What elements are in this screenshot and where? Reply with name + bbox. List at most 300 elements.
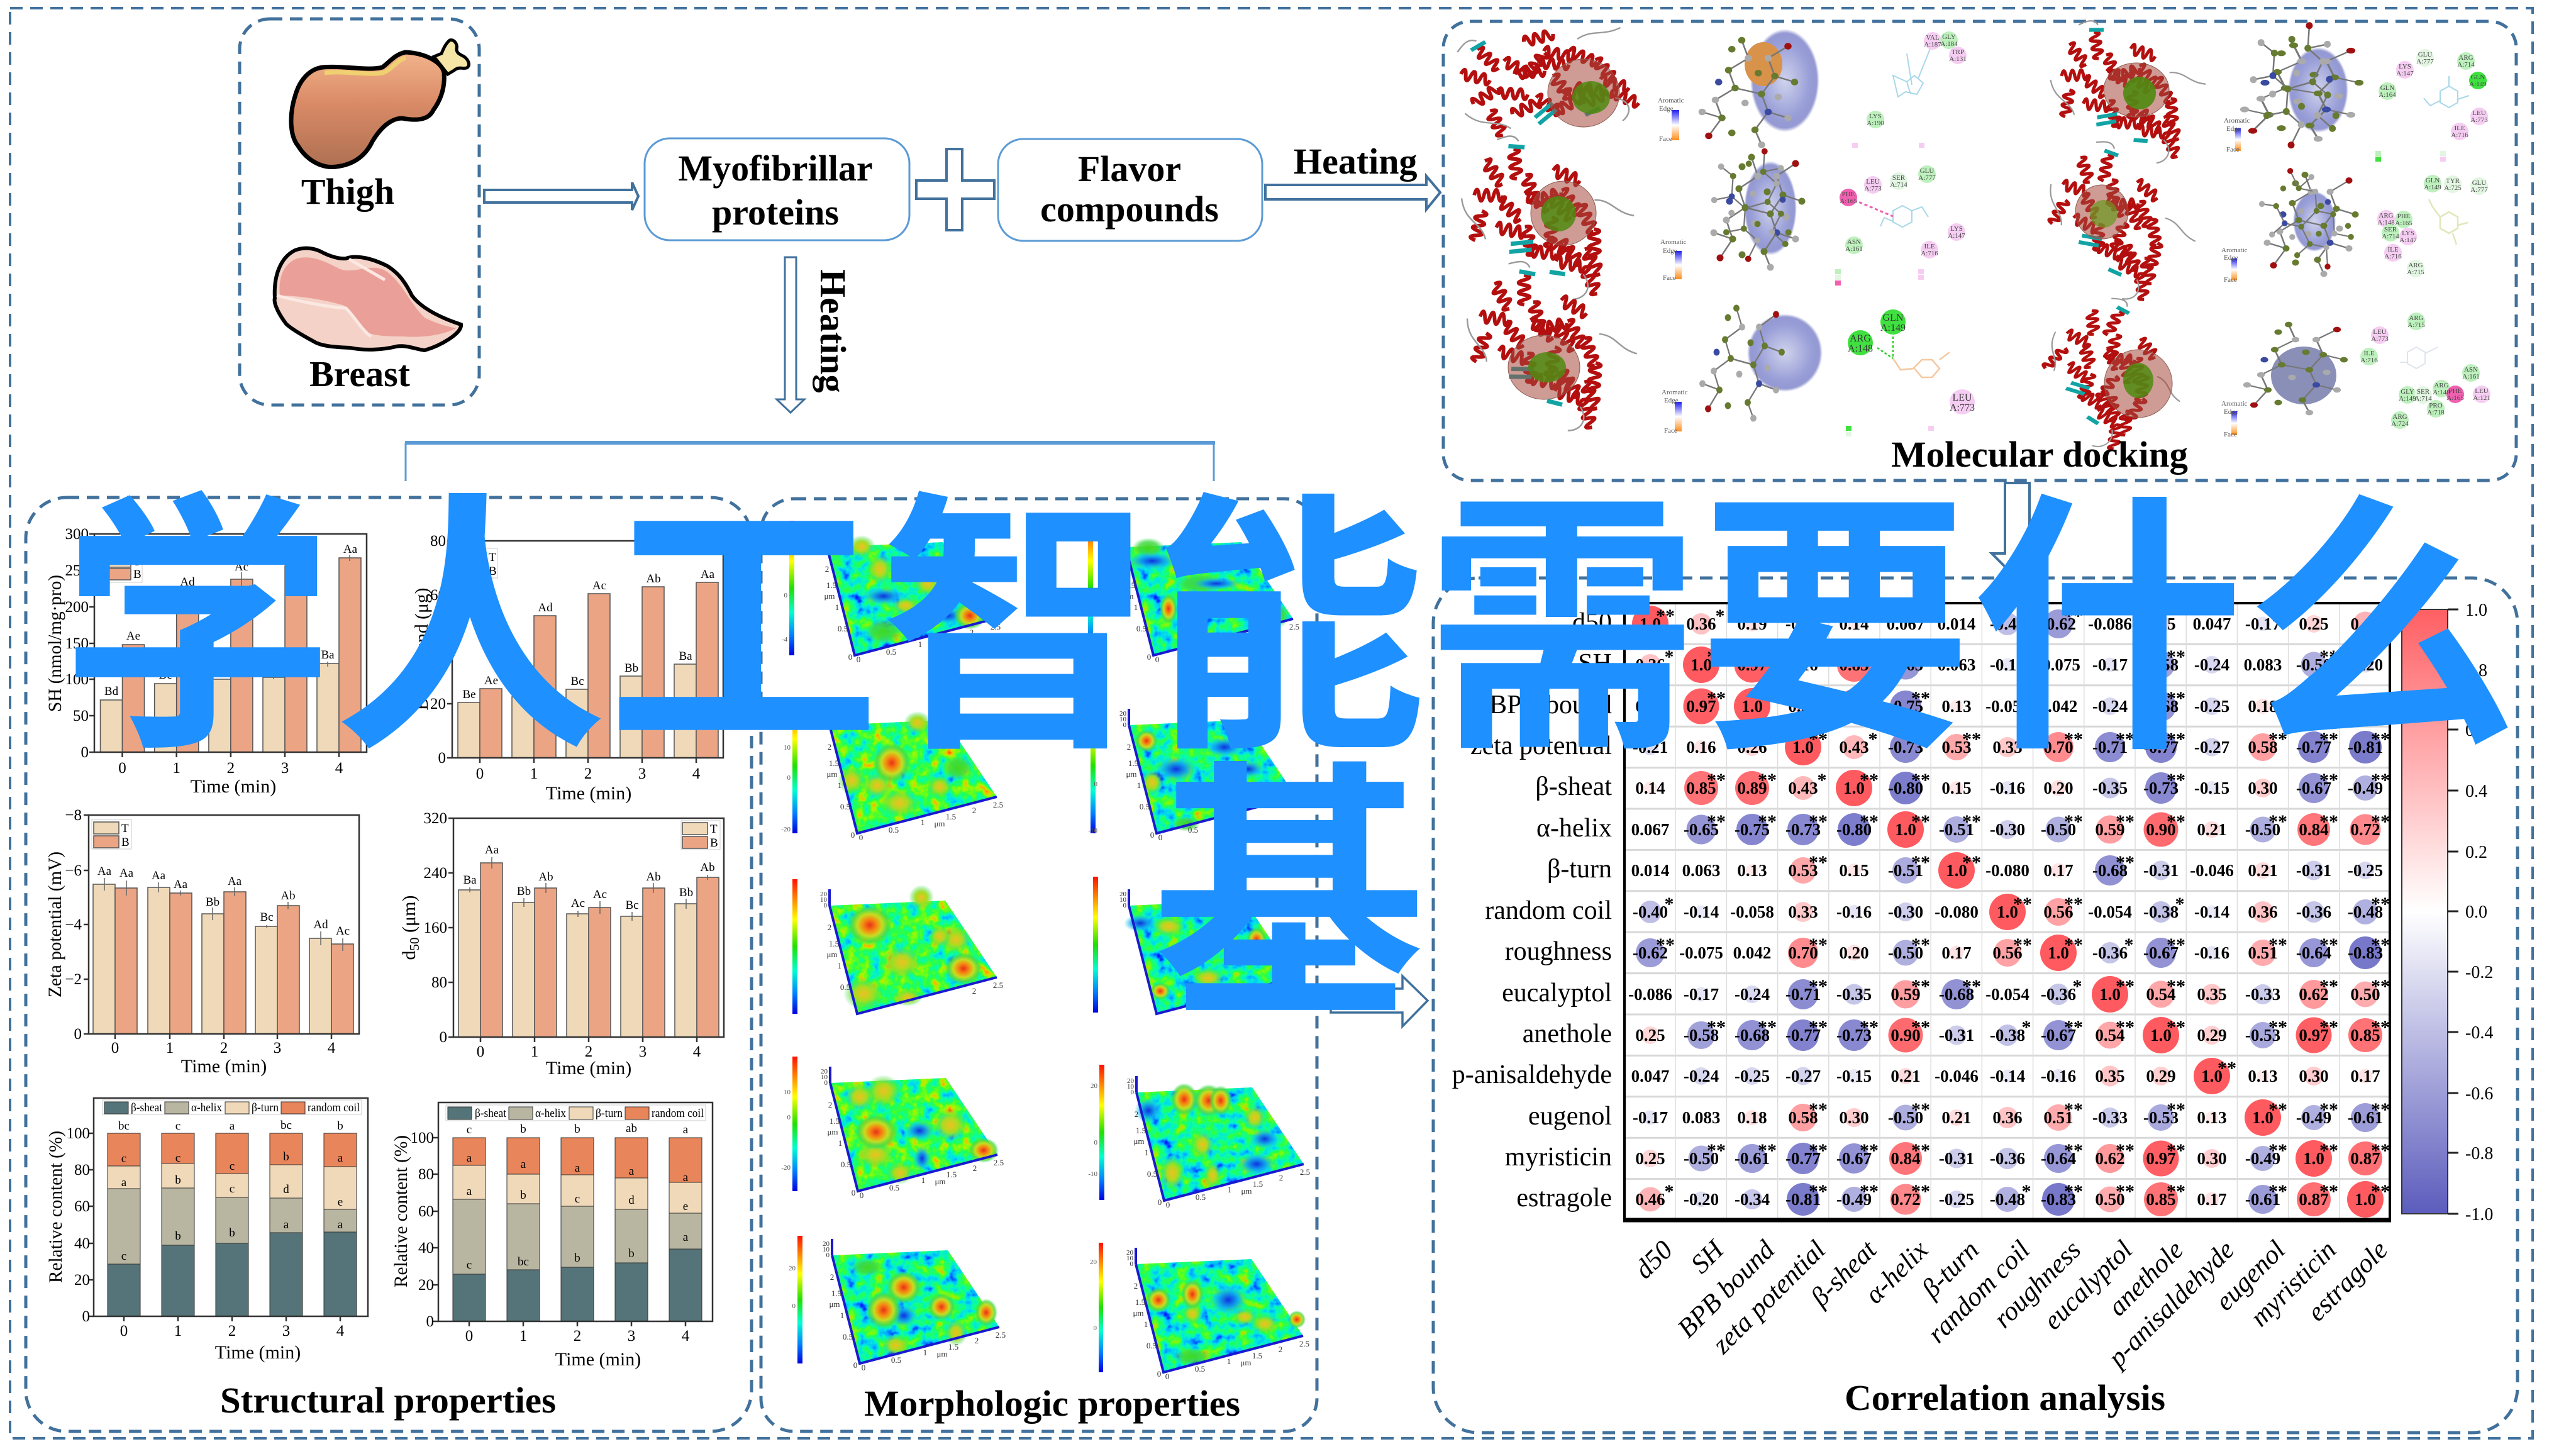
row: β-sheat: ** [1707,770,1726,791]
AFM surface 2: 2 [828,742,831,752]
chart: zeta potential: Aa [119,867,134,880]
interaction diagram 2: A:165 [1840,197,1857,205]
ligand surface 4 [2229,9,2370,158]
chart: stacked breast: 4 [682,1328,690,1345]
row: zeta potential: -0.77 [2143,738,2179,757]
row: myristicin: myristicin [1505,1143,1612,1172]
row: SH: 0.16 [1788,655,1818,674]
row: estragole: ** [2319,1181,2338,1202]
row: myristicin: ** [1758,1140,1777,1161]
x-axis variable labels: β-sheat [1805,1235,1883,1313]
AFM surface 10: 20 [1126,1249,1133,1257]
interaction diagram 6: A:714 [2414,395,2432,402]
row: d50: ** [2064,606,2083,626]
chart: zeta potential: 0 [111,1040,119,1057]
row: eugenol: ** [2167,1099,2185,1120]
row: estragole: ** [1911,1181,1930,1202]
row: myristicin: ** [1911,1140,1930,1161]
row: eucalyptol: -0.35 [1836,985,1872,1004]
chart: zeta potential: Zeta potential (mV) [45,852,65,997]
chart: SH: Ac [235,560,248,574]
chart: d50: T [710,823,718,836]
AFM surface 5: 1.5 [948,1342,958,1352]
AFM surface 1: μm [931,641,943,650]
correlation color scale [2402,601,2493,1224]
AFM surface 6: 1.5 [1125,580,1135,590]
row: anethole: ** [2116,1017,2135,1038]
row: anethole: -0.77 [1785,1026,1821,1045]
label: Thigh: Thigh [301,171,394,212]
chart: stacked breast: 60 [418,1203,434,1220]
row: α-helix: ** [2064,811,2083,832]
AFM surface 7 [1119,709,1296,842]
row: β-turn: β-turn [1547,855,1612,884]
chart: stacked thigh: d [283,1183,289,1196]
chart: SH: Aa [343,543,358,556]
interaction diagram 5: LYS [2402,230,2414,237]
aromatic legends: Aromatic [1658,97,1684,104]
chart: zeta potential [45,807,359,1077]
row: β-sheat: -0.15 [2194,779,2229,797]
row: SH: -0.14 [1990,655,2025,674]
AFM surface 2: 1 [838,780,841,790]
row: myristicin: 0.84 [1890,1149,1921,1168]
row: zeta potential: zeta potential [1470,731,1612,760]
AFM surface 4: 1 [838,1138,842,1148]
AFM surface 6: 10 [1116,538,1123,545]
chart: stacked breast: 1 [519,1328,527,1345]
chart: stacked breast: a [629,1165,635,1178]
row: β-sheat: 0.89 [1737,779,1767,797]
row: d50: 0.25 [2299,614,2329,633]
x-axis variable labels [1629,1234,2394,1374]
row: α-helix: 0.90 [2146,820,2176,839]
x-axis variable labels: eugenol [2210,1235,2291,1316]
row: p-anisaldehyde: 0.30 [2299,1067,2329,1085]
AFM surface 5 [823,1239,1006,1372]
chart: BPB bound: 60 [430,587,446,604]
chart: stacked breast: 100 [410,1130,434,1146]
row: myristicin: -0.77 [1785,1149,1821,1168]
interaction diagram 3: LEU [1952,392,1972,403]
panel: meat sources [240,19,479,405]
chart: BPB bound: Ad [538,601,553,614]
AFM surface 4: 1 [921,1175,925,1185]
chart: zeta potential: Bb [206,896,219,909]
row: anethole: ** [1860,1017,1879,1038]
row: roughness: ** [1809,935,1828,955]
chart: d50: 3 [639,1043,647,1060]
row: myristicin: 0.25 [1635,1149,1665,1168]
row: d50: * [1716,606,1724,626]
AFM surface 4: 20 [821,1068,828,1075]
chart: stacked breast: a [575,1162,580,1175]
interaction diagram 5: ARG [2408,262,2423,269]
AFM surface 1: 1.5 [826,580,836,590]
row: eugenol: 0.30 [1839,1108,1869,1127]
chart: stacked thigh: 1 [174,1323,182,1340]
row: myristicin: 1.0 [2303,1149,2324,1168]
interaction diagram 1 [1852,31,1967,148]
chart: stacked breast: a [467,1152,472,1165]
row: β-sheat: * [1818,770,1826,791]
AFM surface 6: 0.5 [1136,624,1146,633]
row: p-anisaldehyde: -0.14 [1990,1067,2025,1085]
chart: stacked thigh: 2 [228,1323,236,1340]
aromatic legends: Face [1659,135,1672,143]
interaction diagram 6: A:718 [2427,409,2445,416]
row: zeta potential: 1.0 [1792,738,1814,757]
row: p-anisaldehyde: -0.16 [2041,1067,2076,1085]
colorbars: 0 [1094,1139,1098,1146]
row: eugenol: ** [2268,1099,2287,1120]
row: myristicin [1505,1140,2390,1177]
interaction diagram 5: SER [2384,226,2397,233]
AFM surface 1: μm [824,591,835,601]
row: BPB bound: ** [1911,688,1930,709]
row: roughness: ** [2064,935,2083,955]
row: eucalyptol: -0.054 [1985,985,2029,1004]
interaction diagram 5: A:149 [2424,184,2441,191]
AFM surface 9: 1.5 [1136,1126,1146,1135]
row: zeta potential: 0.70 [2043,738,2074,757]
row: random coil: -0.16 [1836,902,1872,921]
heading: correlation analysis: Correlation analysis [1845,1377,2165,1418]
label: heating right: Heating [1294,141,1418,182]
row: roughness: ** [2268,935,2287,955]
chart: SH: Bc [213,664,226,677]
chart: SH: Ae [126,630,140,643]
interaction diagram 3: ARG [1850,333,1871,344]
row: BPB bound: -0.61 [2296,697,2331,716]
chart: stacked breast: random coil [652,1107,704,1120]
row: myristicin: -0.64 [2041,1149,2076,1168]
AFM surface 2: 20 [820,710,828,718]
row: d50: 0.36 [1686,614,1716,633]
chart: zeta potential: 1 [166,1040,174,1057]
row: estragole: -0.61 [2245,1190,2280,1209]
AFM surface 10: 0 [1165,1372,1169,1381]
row: β-sheat: 1.0 [1843,779,1865,797]
AFM surface 6 [1116,531,1299,664]
row: roughness: 0.56 [1992,943,2023,962]
row: estragole: 0.46 [1635,1190,1665,1209]
row: zeta potential: 0.58 [2248,738,2278,757]
row: α-helix: α-helix [1536,814,1612,843]
colorbars: 0 [792,1302,796,1310]
row: p-anisaldehyde: -0.046 [1935,1067,1979,1085]
chart: d50: B [710,836,718,850]
row: eucalyptol: * [2073,976,2082,997]
row: eucalyptol: ** [1962,976,1981,997]
row: SH: SH [1578,649,1612,678]
bracket connector [405,443,1215,481]
colorbars [781,521,1104,1372]
aromatic legends: Face [2224,276,2237,284]
chart: d50: Ac [593,888,607,901]
AFM surface 7: 2 [1127,742,1131,752]
correlation color scale: 0.2 [2465,843,2487,862]
row: anethole: 0.29 [2197,1026,2227,1045]
row: eugenol: 0.36 [1992,1108,2023,1127]
AFM surface 3 [820,885,1003,1014]
row: anethole: ** [2167,1017,2185,1038]
row: BPB bound: ** [1707,688,1726,709]
row: β-sheat: -0.80 [1888,779,1923,797]
row: β-sheat: -0.35 [2092,779,2128,797]
row: eugenol: 0.083 [1682,1108,1720,1127]
row: d50: 0.19 [1737,614,1767,633]
chart: stacked breast: c [467,1258,472,1272]
AFM surface 7: 1 [1137,780,1141,790]
row: eucalyptol: -0.68 [1939,985,1974,1004]
row: eucalyptol: 1.0 [2099,985,2121,1004]
row: SH: 0.063 [1938,655,1975,674]
row: myristicin: -0.67 [1836,1149,1872,1168]
chart: stacked breast: a [683,1171,689,1184]
interaction diagram 1: TRP [1951,48,1964,56]
row: α-helix: ** [1860,811,1879,832]
row: myristicin: ** [2064,1140,2083,1161]
chart: zeta potential: Time (min) [181,1056,267,1077]
row: SH: -0.50 [2296,655,2331,674]
row: roughness: 0.20 [1839,943,1869,962]
interaction diagram 6: ARG [2434,382,2449,389]
ligand surface 1 [1699,29,1819,148]
AFM surface 10: 1 [1144,1319,1148,1329]
chart: zeta potential: Ab [280,889,296,902]
interaction diagram 6: LEU [2475,387,2489,395]
row: SH: -0.17 [2092,655,2128,674]
chart: stacked thigh: α-helix [191,1101,222,1114]
correlation color scale: 0.6 [2465,721,2487,740]
row: α-helix: 1.0 [1895,820,1916,839]
AFM surface 10: 10 [1126,1255,1133,1262]
row: random coil [1485,894,2390,930]
row: BPB bound: -0.24 [2092,697,2128,716]
row: anethole: 0.54 [2095,1026,2125,1045]
row: anethole: ** [2371,1017,2390,1038]
row: random coil: -0.14 [1684,902,1719,921]
chart: stacked breast: b [520,1123,526,1136]
row: α-helix: ** [2319,811,2338,832]
interaction diagram 1: VAL [1926,34,1940,42]
row: BPB bound: ** [2319,688,2338,709]
chart: stacked thigh: c [121,1250,126,1263]
row: roughness: 0.51 [2248,943,2278,962]
row: β-turn: 0.21 [2248,861,2278,880]
row: p-anisaldehyde: 1.0 [2201,1067,2223,1085]
row: zeta potential [1470,729,2390,765]
interaction diagram 5: GLN [2426,177,2440,184]
row: eucalyptol: -0.71 [1785,985,1821,1004]
x-axis variable labels: zeta potential [1706,1235,1831,1360]
row: BPB bound: -0.25 [2194,697,2229,716]
row: myristicin: 0.87 [2350,1149,2380,1168]
row: zeta potential: -0.81 [2348,738,2383,757]
row: BPB bound: -0.75 [1888,697,1923,716]
arrow: meat to proteins [484,182,638,210]
row: BPB bound: -0.058 [1985,697,2029,716]
correlation color scale: 1.0 [2465,601,2487,620]
row: BPB bound: 0.042 [2040,697,2077,716]
row: random coil: * [2175,894,2185,914]
panel: correlation analysis [1433,578,2518,1433]
AFM surface 3: 2.5 [993,980,1003,990]
interaction diagram 6: ASN [2464,366,2478,374]
colorbars: -10 [1088,827,1097,835]
row: SH: 0.97 [1737,655,1767,674]
AFM surface 5: 0.5 [843,1332,853,1341]
arrow: docking to correlation [1992,483,2042,579]
interaction diagram 5: TYR [2446,177,2460,185]
row: eucalyptol: 0.54 [2146,985,2176,1004]
chart: SH [45,526,367,797]
interaction diagram 6: LEU [2373,328,2387,336]
chart: stacked breast: 0 [426,1313,434,1330]
colorbars: 0 [787,1114,791,1121]
panel: structural properties [26,497,752,1431]
aromatic legends: Edge [1664,397,1679,404]
row: p-anisaldehyde: 0.35 [2095,1067,2125,1085]
x-axis variable labels: anethole [2102,1235,2189,1322]
interaction diagram 2: PHE [1842,191,1855,198]
chart: stacked breast: 20 [418,1277,434,1294]
interaction diagram 2: ILE [1924,243,1935,250]
AFM surface 4: 2.5 [994,1158,1004,1167]
row: α-helix: ** [1911,811,1930,832]
AFM surface 10: 1 [1227,1357,1231,1366]
chart: SH: 4 [335,760,343,777]
AFM surface 4: 2 [973,1163,977,1173]
row: α-helix: ** [1707,811,1726,832]
correlation color scale: 0.0 [2465,902,2487,922]
row: roughness: -0.50 [1888,943,1923,962]
row: α-helix: ** [2371,811,2390,832]
row: myristicin: 0.30 [2197,1149,2227,1168]
row: estragole: -0.49 [1836,1190,1872,1209]
row: zeta potential: ** [1809,729,1828,750]
row: eucalyptol: -0.24 [1735,985,1770,1004]
AFM surface 7: 0.5 [1188,825,1198,835]
AFM surface 6: 20 [1116,532,1123,540]
row: α-helix: -0.50 [2245,820,2280,839]
chart: d50: 1 [531,1043,538,1060]
row: eucalyptol: -0.086 [1628,985,1672,1004]
AFM surface 9: 2 [1135,1109,1138,1119]
chart: zeta potential: −2 [65,971,82,988]
AFM surface 10: μm [1240,1358,1252,1367]
overlay title: 基 [1153,746,1426,1051]
AFM surface 2: μm [934,819,945,828]
chart: BPB bound: BPB bound (μg) [411,587,432,711]
row: eucalyptol: ** [2116,976,2135,997]
chart: stacked breast: b [628,1247,635,1260]
row: SH: 0.85 [1839,655,1869,674]
AFM surface 10: 0 [1157,1369,1161,1379]
row: roughness: -0.16 [2194,943,2229,962]
colorbars: 0 [1094,780,1098,788]
AFM surface 3: 10 [820,896,828,904]
chart: stacked thigh: 80 [74,1162,90,1179]
chart: d50: 50 [407,937,422,950]
AFM surface 3: 0.5 [840,982,850,992]
chart: zeta potential: Aa [228,875,242,888]
row: β-turn: -0.31 [2296,861,2331,880]
chart: BPB bound: 40 [430,641,446,658]
row: anethole: 0.97 [2299,1026,2329,1045]
box: myofibrillar proteins: Myofibrillar [678,148,873,189]
AFM surface 3: μm [826,950,838,959]
interaction diagram 3 [1846,309,1975,436]
row: eugenol: -0.49 [2296,1108,2331,1127]
row: SH: -0.20 [2348,655,2383,674]
AFM surface 1: 2 [825,564,829,574]
row: random coil: -0.36 [2296,902,2331,921]
chart: stacked breast: a [683,1123,689,1136]
row: estragole: 0.72 [1890,1190,1921,1209]
row: SH: ** [2167,647,2185,667]
row: anethole: * [2021,1017,2031,1038]
interaction diagram 1: LYS [1869,113,1882,120]
row: estragole: estragole [1516,1184,1612,1213]
chart: BPB bound: Bc [570,675,584,688]
ligand surface 6 [2243,322,2348,415]
row: β-sheat: ** [1758,770,1777,791]
row: α-helix: -0.73 [1785,820,1821,839]
chart: zeta potential: 0 [74,1026,82,1043]
icon: chicken breast [275,248,461,350]
row: eugenol: ** [2319,1099,2338,1120]
chart: BPB bound: 0 [476,765,484,782]
row: anethole: 0.25 [1635,1026,1665,1045]
row: zeta potential: ** [2116,729,2135,750]
interaction diagram 6: ARG [2409,314,2424,322]
chart: stacked thigh: 100 [67,1125,90,1142]
AFM surface 1: 1 [918,640,922,649]
row: α-helix: 0.72 [2350,820,2380,839]
row: d50 [1572,606,2389,642]
row: β-sheat: 0.15 [1941,779,1972,797]
AFM surface 5: 1 [923,1348,927,1357]
AFM surface 9: 1 [1145,1148,1148,1157]
arrow: compounds to docking [1265,176,1440,209]
AFM surface 6: 1 [1134,602,1138,612]
interaction diagram 3: GLN [1883,313,1903,323]
row: myristicin: ** [2116,1140,2135,1161]
row: anethole: ** [1809,1017,1828,1038]
row: d50: * [2021,606,2031,626]
label: Breast: Breast [309,353,411,394]
chart: d50 [399,810,724,1079]
chart: stacked breast: c [575,1192,580,1206]
chart: stacked breast: 2 [574,1328,581,1345]
row: SH: 1.0 [1690,655,1712,674]
interaction diagram 4: ILE [2454,125,2465,132]
AFM surface 4: μm [827,1127,838,1136]
interaction diagram 6: A:161 [2462,373,2480,380]
interaction diagram 6: A:149 [2399,395,2416,402]
interaction diagram 5: A:165 [2395,219,2412,227]
row: estragole: ** [1860,1181,1879,1202]
chart: SH: Ab [288,551,303,564]
chart: stacked breast: e [683,1200,688,1213]
aromatic legends: Edge [2224,254,2238,262]
aromatic legends: Aromatic [1662,389,1688,396]
chart: stacked thigh: c [230,1160,235,1173]
AFM surface 3: 2 [972,986,976,996]
row: random coil: -0.054 [2088,902,2132,921]
